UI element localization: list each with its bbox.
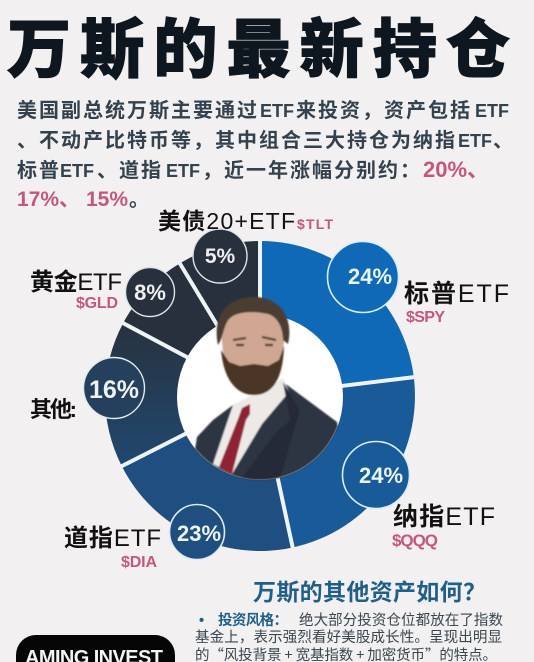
segment: DIA 23% (122, 396, 292, 551)
investment style text block: 基金上，表示强烈看好美股成长性。呈现出明显 (195, 629, 502, 646)
label: GLD: 黄金ETF (30, 268, 122, 296)
label: QQQ: $QQQ (392, 531, 438, 550)
segment: GLD 8% (123, 263, 260, 396)
label: QQQ (392, 503, 495, 550)
title: 万斯的最新持仓 (7, 14, 510, 86)
intro text block: 来投资，资产包括 (296, 99, 472, 122)
label: DIA: 道指ETF (64, 525, 161, 552)
badge: 5% TLT (193, 229, 247, 283)
label: SPY: 标普ETF (404, 280, 509, 308)
investment style text block: 投资风格： (218, 611, 288, 629)
investment style text block: 绝大部分投资仓位都放在了指数 (299, 612, 504, 629)
investment style text block: • (199, 613, 204, 629)
badge: 24% SPY (328, 242, 398, 312)
label: GLD: $GLD (76, 295, 118, 312)
badge: AMING INVEST (16, 635, 175, 662)
subheading: 万斯的其他资产如何？ (253, 579, 486, 605)
badge: 8% GLD (126, 268, 174, 316)
intro text block: ETF (458, 131, 492, 151)
badge: 24% QQQ: 24% (359, 463, 403, 488)
intro text block: ，近一年涨幅分别约： (202, 159, 422, 182)
label: DIA: $DIA (121, 554, 157, 571)
badge: 16% other: 16% (89, 376, 139, 404)
badge: 24% SPY: 24% (348, 264, 392, 289)
label: DIA (64, 525, 161, 571)
segment: TLT 5% (180, 241, 260, 396)
label: TLT: 美债20+ETF (158, 208, 295, 234)
badge: 5% TLT: 5% (205, 245, 235, 268)
intro text block: 20%、 (423, 157, 489, 182)
intro text block: 、 (493, 130, 515, 152)
intro text block: 15% (86, 188, 128, 211)
intro text block: 、道指 (97, 159, 163, 182)
badge: 23% DIA (170, 504, 224, 560)
segment: SPY 24% (260, 241, 414, 396)
label: GLD (30, 268, 122, 312)
portrait photo (190, 297, 345, 480)
intro text block (17, 98, 515, 211)
intro text block: 标普 (17, 159, 61, 182)
label: other: 其他: (30, 397, 77, 422)
label: TLT: $TLT (297, 216, 333, 232)
intro text block: ETF (166, 161, 200, 181)
investment style text block (195, 611, 504, 662)
intro text block: ETF (475, 101, 509, 121)
badge: 23% DIA: 23% (177, 521, 221, 546)
donut chart (105, 240, 415, 551)
badge: 24% QQQ (342, 442, 410, 508)
intro text block: ETF (60, 161, 94, 181)
intro text block: ETF (260, 101, 294, 121)
segment: other 16% (105, 323, 260, 466)
intro text block: 美国副总统万斯主要通过 (17, 98, 259, 122)
label: SPY (404, 280, 509, 326)
badge: 16% other (84, 358, 144, 418)
label: QQQ: 纳指ETF (393, 503, 495, 531)
label: SPY: $SPY (406, 309, 445, 326)
intro text block: 17%、 (17, 188, 80, 211)
intro text block: 。 (129, 189, 151, 211)
badge: 8% GLD: 8% (134, 280, 166, 305)
intro text block: 、不动产比特币等，其中组合三大持仓为纳指 (17, 129, 457, 152)
segment: QQQ 24% (260, 377, 415, 548)
